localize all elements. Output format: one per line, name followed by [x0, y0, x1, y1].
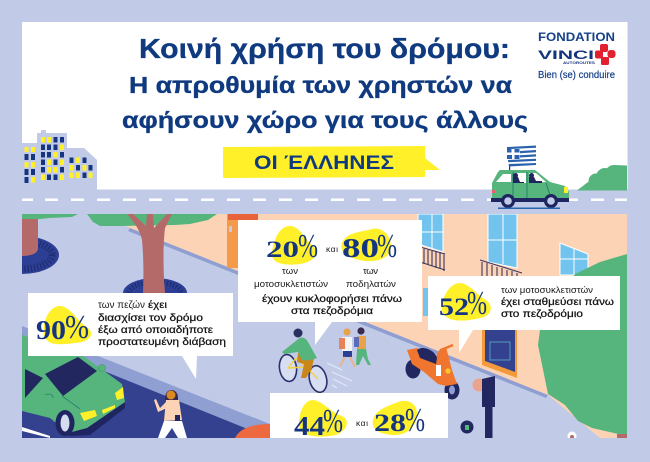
title [122, 33, 528, 133]
door: blue entrance [482, 325, 517, 378]
illustration: green car with Greek flag [491, 146, 569, 209]
text: 90% caption [98, 299, 226, 348]
road [22, 371, 246, 438]
blob: yellow 52 [442, 283, 491, 321]
text: cyclists label: ποδηλατών [346, 279, 396, 290]
text: pavement caption: έχουν κυκλοφορήσει πάνω [262, 293, 402, 305]
blob: yellow 90 [44, 306, 91, 344]
text: motorcyclists label: μοτοσυκλετιστών [254, 279, 328, 290]
title: Η απροθυμία των χρηστών να [129, 72, 512, 98]
number: 90%: 90 [36, 315, 66, 345]
bottom right trunk [568, 432, 627, 438]
text: και: και [326, 244, 338, 254]
logo: Fondation Vinci Autoroutes: VINCI [538, 50, 594, 62]
road curb [22, 326, 270, 428]
number: 90% [36, 309, 89, 346]
building facade [100, 214, 627, 438]
text: και: και [356, 418, 368, 428]
callout: 52% parked on pavement [428, 276, 620, 353]
car: green, foreground [22, 335, 125, 436]
logo: Fondation Vinci Autoroutes [538, 30, 616, 81]
number: 44%: % [323, 403, 343, 440]
tree trunks [22, 214, 187, 293]
blob: yellow 44 [299, 400, 347, 437]
text: 52% caption [501, 285, 614, 320]
logo: Fondation Vinci Autoroutes: Bien (se) conduire [538, 70, 615, 81]
banner: ΟΙ ΈΛΛΗΝΕΣ: ΟΙ ΈΛΛΗΝΕΣ [254, 152, 394, 174]
number: 44% [294, 403, 343, 441]
pedestrian crossing [154, 390, 187, 438]
logo: Fondation Vinci Autoroutes: AUTOROUTES [563, 61, 596, 65]
text: pavement caption [262, 293, 402, 317]
number: 28%: % [405, 402, 425, 439]
blob: yellow 20 [272, 226, 316, 265]
illustration: street scene [0, 214, 627, 440]
panel: header [22, 22, 628, 190]
door: orange top left [227, 214, 258, 268]
logo: Fondation Vinci Autoroutes: FONDATION [538, 30, 615, 44]
text: motorcyclists label [254, 266, 328, 290]
scooter [406, 345, 460, 400]
number: 28% [374, 402, 425, 439]
windows and balconies [418, 214, 588, 316]
text: 52% caption: των μοτοσυκλετιστών [501, 285, 593, 296]
tree canopy [22, 214, 627, 436]
cyclist [278, 328, 330, 394]
text: cyclists label: των [363, 266, 378, 277]
number: 44%: 44 [294, 411, 325, 441]
children walking [339, 327, 371, 367]
text: 90% caption: διασχίσει τον δρόμο [98, 312, 203, 324]
number: 52% [439, 285, 487, 322]
number: 52%: 52 [439, 294, 469, 321]
banner: ΟΙ ΈΛΛΗΝΕΣ [223, 146, 440, 178]
illustration: city skyline [22, 130, 97, 190]
title: Κοινή χρήση του δρόμου: [139, 33, 510, 64]
number: 52%: % [467, 285, 487, 322]
traffic lights [460, 376, 495, 438]
number: 80%: % [377, 228, 397, 265]
text: 90% caption: των πεζών [98, 299, 145, 311]
callout: 20% and 80% on pavements [238, 220, 422, 345]
text: motorcyclists label: των [282, 266, 298, 277]
number: 80%: 80 [342, 233, 379, 263]
icon: red cross [595, 44, 616, 65]
blob: yellow 80 [341, 228, 391, 261]
icon: Greek flag [507, 146, 536, 173]
text: pavement caption: στα πεζοδρόμια [291, 305, 373, 317]
road marking [22, 427, 50, 438]
number: 20% [266, 228, 318, 265]
speed lines [327, 363, 352, 388]
illustration: road dashes [22, 198, 627, 201]
text: 90% caption: έξω από οποιαδήποτε [98, 324, 213, 336]
number: 28%: 28 [374, 410, 406, 437]
text: 52% caption: έχει σταθμεύσει πάνω [501, 296, 614, 308]
number: 80% [342, 228, 397, 265]
callout: 90% pedestrians [28, 293, 233, 379]
text: 52% caption: στο πεζοδρόμιο [501, 308, 583, 320]
illustration: bush [577, 165, 627, 190]
callout: 44% and 28% [270, 393, 448, 441]
blob: yellow 28 [373, 401, 417, 435]
number: 20%: 20 [266, 237, 299, 262]
number: 20%: % [298, 228, 318, 265]
text: cyclists label [346, 266, 396, 290]
text: 90% caption: έχει [148, 299, 168, 311]
orange shape at road edge [235, 424, 270, 438]
text: 90% caption: προστατευμένη διάβαση [98, 336, 226, 348]
sidewalk edge [128, 228, 548, 398]
number: 90%: % [65, 309, 89, 346]
title: αφήσουν χώρο για τους άλλους [122, 107, 528, 133]
